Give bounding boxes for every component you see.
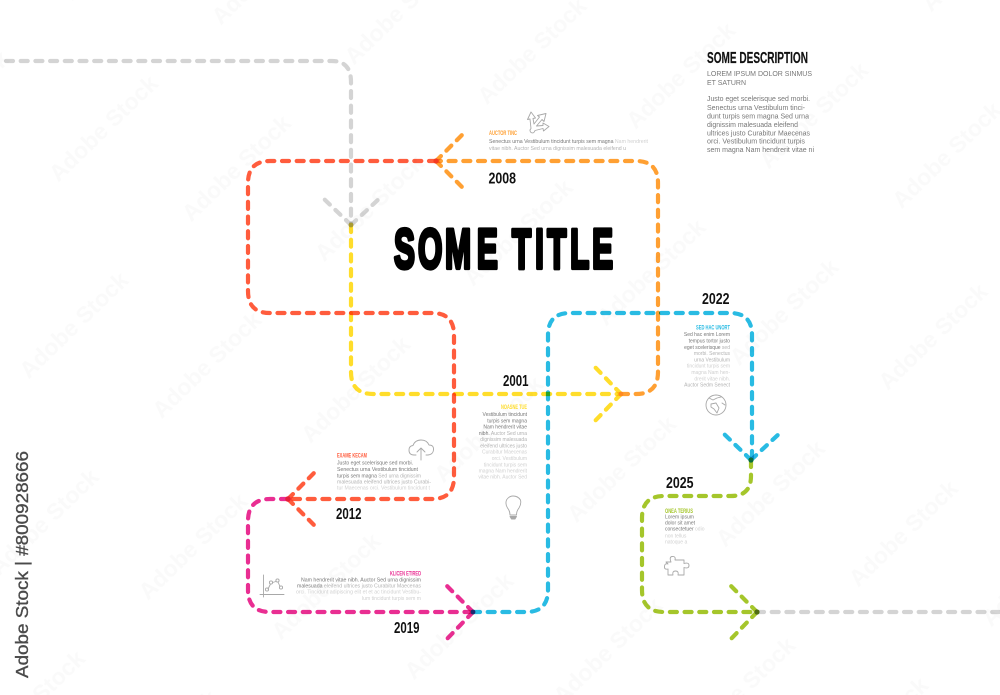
heading klicen etired: KLICEN ETIRED [390, 572, 421, 578]
year 2008: 2008 [488, 170, 516, 188]
description heading: SOME DESCRIPTION [707, 50, 808, 67]
timeline: yellow segment 2001 [351, 225, 621, 423]
description body [707, 96, 814, 154]
icon: light bulb [506, 496, 521, 519]
timeline: magenta segment 2019 [248, 499, 473, 641]
body 2012: turpis sem magna Sed urna dignissim [337, 473, 421, 479]
body 2019: Nam hendrerit vitae nibh. Auctor Sed urna dignissim [301, 577, 421, 583]
year 2025: 2025 [666, 475, 694, 492]
body 2019: orci. Tincidunt adipiscing elit et et ac tincidunt Vestibu- [296, 590, 421, 596]
icon: globe [706, 395, 726, 415]
description panel [707, 50, 814, 154]
timeline: red segment 2012 [248, 161, 454, 528]
body 2001: magna Nam hendrerit [479, 468, 528, 474]
body 2008 [489, 139, 649, 152]
body 2001: Curabitur Maecenas [482, 450, 527, 456]
body 2012: malesuada eleifend ultrices justo Curabi- [337, 479, 431, 485]
body 2025 [665, 514, 705, 545]
text block: 2001 [478, 373, 529, 481]
title: SOME TITLE [394, 217, 613, 280]
body 2001: Nam hendrerit vitae [483, 425, 527, 431]
year 2012: 2012 [336, 506, 362, 523]
heading exame kecam: EXAME KECAM [337, 454, 367, 460]
body 2001: nibh. Auctor Sed urna [479, 431, 527, 437]
description body: Justo eget scelerisque sed morbi. [707, 96, 810, 103]
body 2022: magna Nam hen- [691, 370, 730, 376]
timeline: blue segment 2022 [473, 313, 781, 612]
text block: 2022 [684, 291, 731, 388]
icon: line chart [260, 575, 284, 597]
heading sed hac unort: SED HAC UNORT [696, 326, 730, 332]
body 2019: lum tincidunt turpis sem m [362, 596, 421, 602]
year 2001: 2001 [503, 373, 529, 390]
description body: Senectus urna Vestibulum tinci- [707, 105, 806, 112]
body 2025: non tellus [665, 533, 687, 539]
body 2025: Lorem ipsum [665, 514, 694, 520]
icon: branching arrows [528, 112, 549, 133]
body 2022: urna Vestibulum [694, 357, 730, 363]
year 2019: 2019 [394, 620, 420, 637]
description body: sem magna Nam hendrerit vitae ni [707, 147, 814, 154]
junction nodes [285, 158, 760, 615]
icon: puzzle piece [664, 556, 689, 575]
body 2022: Auctor Sedm Senect [684, 382, 731, 388]
description body: dignissim malesuada eleifend [707, 122, 798, 129]
heading onea terius: ONEA TERIUS [665, 509, 693, 515]
timeline: gray end line [757, 610, 1000, 614]
body 2012 [337, 461, 431, 492]
body 2022: eget scelerisque sed [684, 345, 730, 351]
text block: 2012 [336, 454, 431, 523]
timeline: orange segment 2008 [436, 132, 658, 394]
body 2001: tincidunt turpis sem [484, 462, 527, 468]
body 2025: consectetuer odio [665, 527, 705, 533]
description subheading: ET SATURN [707, 78, 746, 87]
body 2001 [478, 412, 528, 481]
body 2022: morbi. Senectus [694, 351, 730, 357]
body 2008: Senectus urna Vestibulum tincidunt turpis sem magna Nam hendrerit [489, 139, 649, 145]
body 2022 [684, 332, 731, 388]
body 2001: vitae nibh. Auctor Sed [478, 475, 527, 481]
heading auctor tinc: AUCTOR TINC [489, 131, 517, 137]
timeline: gray start line [6, 61, 381, 225]
description subheading: LOREM IPSUM DOLOR SINMUS [707, 69, 812, 78]
year 2022: 2022 [702, 291, 730, 308]
body 2025: natoque a [665, 539, 687, 545]
body 2012: tur Maecenas orci. Vestibulum tincidunt t [337, 486, 431, 492]
body 2022: tempus tortor justo [689, 339, 730, 345]
body 2008: vitae nibh. Auctor Sed urna dignissim malesuada eleifend u [489, 146, 626, 152]
description subheading [707, 69, 812, 87]
side credit text: Adobe Stock | #800928666 [12, 451, 32, 678]
body 2022: tincidunt turpis sem [687, 364, 730, 370]
text block: 2019 [296, 572, 422, 637]
body 2012: Senectus urna Vestibulum tincidunt [337, 467, 419, 473]
body 2001: orci. Vestibulum [492, 456, 527, 462]
body 2012: Justo eget scelerisque sed morbi. [337, 461, 413, 467]
body 2025: dolor sit amet [665, 521, 696, 527]
body 2001: dignissim malesuada [480, 437, 527, 443]
body 2001: turpis sem magna [487, 418, 527, 424]
icon: cloud upload [409, 440, 434, 460]
description body: ultrices justo Curabitur Maecenas [707, 130, 810, 138]
body 2022: drerit vitae nibh. [694, 376, 730, 382]
body 2019: malesuada eleifend ultrices justo Curabitur Maecenas [297, 583, 422, 589]
text block: 2025 [665, 475, 705, 545]
timeline: green segment 2025 [642, 460, 757, 641]
body 2001: eleifend ultrices justo [480, 443, 527, 449]
body 2022: Sed hac enim Lorem [684, 332, 730, 338]
body 2019 [296, 577, 422, 602]
heading noasne tue: NOASNE TUE [501, 405, 527, 411]
body 2001: Vestibulum tincidunt [483, 412, 528, 418]
description body: dunt turpis sem magna Sed urna [707, 114, 809, 120]
text block: 2008 [488, 131, 649, 188]
description body: orci. Vestibulum tincidunt turpis [707, 138, 805, 146]
